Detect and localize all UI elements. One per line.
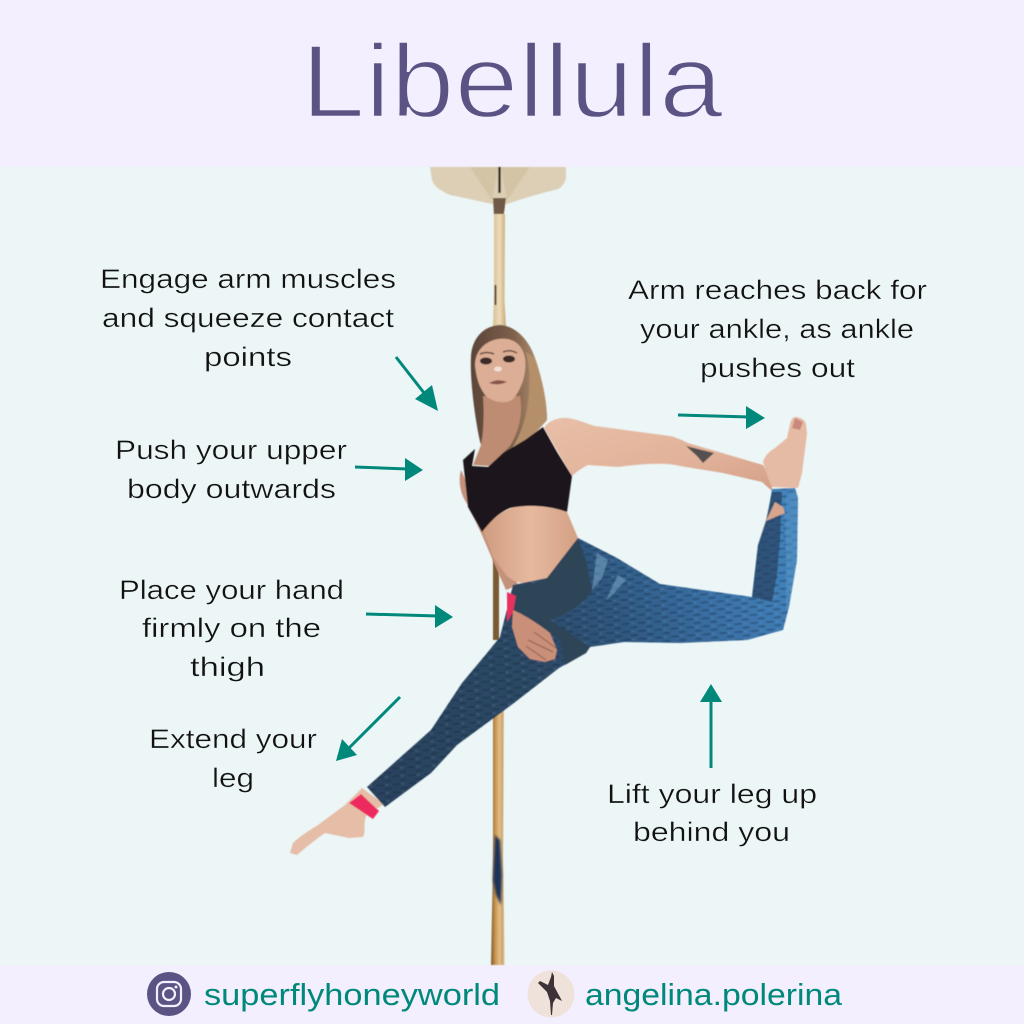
background panel xyxy=(0,167,1024,965)
callout: lift your leg: behind you xyxy=(633,817,790,847)
leggings smooth panel xyxy=(513,538,592,665)
figure: pole dancer in Libellula pose xyxy=(290,325,807,855)
callout: place your hand: firmly on the xyxy=(142,613,321,643)
calf shading xyxy=(752,492,782,602)
callout: push upper body: Push your upper xyxy=(115,435,347,465)
belly xyxy=(483,506,578,583)
black crop top xyxy=(463,427,572,532)
toes shading xyxy=(792,418,803,430)
arrow: to chest xyxy=(355,458,423,481)
icon: instagram xyxy=(147,972,191,1016)
avatar: dancer xyxy=(528,970,574,1018)
callout: arm reaches back: your ankle, as ankle xyxy=(640,314,914,344)
callout: push upper body xyxy=(115,435,347,504)
title: Libellula xyxy=(301,24,723,140)
handle: superflyhoneyworld: superflyhoneyworld xyxy=(204,977,500,1012)
callout: engage arm muscles xyxy=(100,264,396,372)
raised foot xyxy=(763,417,807,488)
hip highlights xyxy=(592,553,626,600)
handle: angelina.polerina: angelina.polerina xyxy=(585,977,843,1012)
arrow: down-left along leg xyxy=(336,697,400,761)
hand on thigh xyxy=(512,610,557,662)
callout: place your hand xyxy=(119,575,344,682)
leggings xyxy=(367,488,798,807)
cutout in leggings xyxy=(766,502,785,521)
callout: push upper body: body outwards xyxy=(127,474,336,504)
pink ankle band xyxy=(349,794,379,819)
arrow: to hand xyxy=(366,605,453,628)
callout: lift your leg: Lift your leg up xyxy=(607,779,817,809)
callout: arm reaches back xyxy=(628,275,927,383)
arrow: up to leg xyxy=(700,684,722,768)
callout: place your hand: Place your hand xyxy=(119,575,344,605)
face xyxy=(475,339,525,402)
arm tattoo xyxy=(686,446,714,463)
shoulder and reaching arm xyxy=(544,418,772,491)
header band xyxy=(0,0,1024,167)
callout: arm reaches back: Arm reaches back for xyxy=(628,275,927,305)
arrow: to raised foot xyxy=(678,406,765,429)
callout: arm reaches back: pushes out xyxy=(700,353,856,383)
callout: extend your leg xyxy=(149,724,317,793)
callout: engage arm muscles: and squeeze contact xyxy=(102,303,395,333)
eyes, nose and mouth xyxy=(480,351,517,384)
callout: place your hand: thigh xyxy=(190,652,265,682)
leggings scale texture xyxy=(367,488,798,807)
pole with ceiling mount xyxy=(430,167,566,965)
callout: engage arm muscles: Engage arm muscles xyxy=(100,264,396,294)
arrow: to shoulder xyxy=(396,357,438,411)
callout: engage arm muscles: points xyxy=(204,342,292,372)
callout: extend your leg: Extend your xyxy=(149,724,317,754)
lower foot xyxy=(290,788,384,855)
calf highlight xyxy=(786,490,798,610)
callout: extend your leg: leg xyxy=(212,763,254,793)
footer band xyxy=(0,965,1024,1024)
neck and chest xyxy=(473,396,521,466)
hair back xyxy=(471,325,547,462)
hair front strand xyxy=(503,352,547,462)
wrist accent xyxy=(507,592,516,622)
fingers xyxy=(526,632,556,660)
far arm xyxy=(460,470,518,590)
callout: lift your leg xyxy=(607,779,817,847)
